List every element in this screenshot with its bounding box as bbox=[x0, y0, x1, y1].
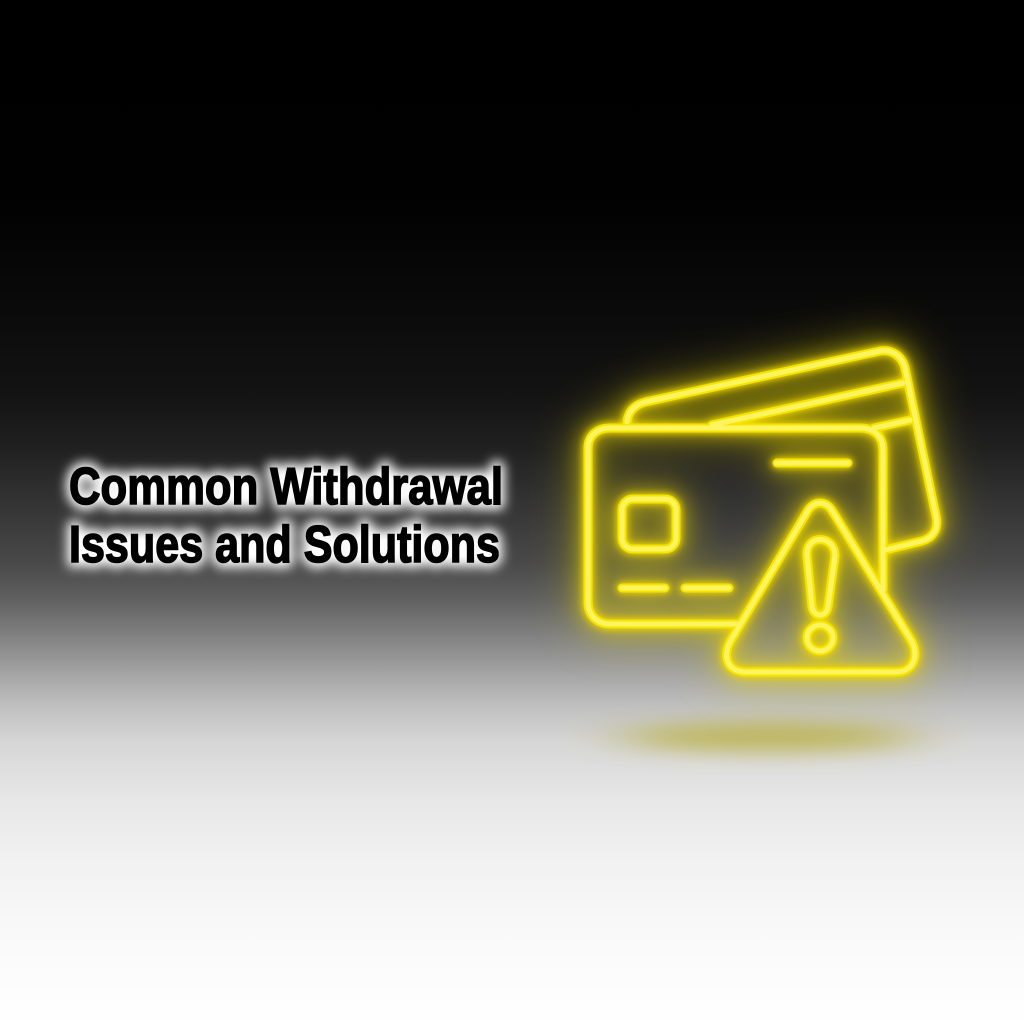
tube highlight bbox=[588, 351, 937, 672]
title bbox=[69, 458, 503, 574]
title text: Common Withdrawal bbox=[69, 458, 503, 516]
tight glow bbox=[588, 351, 937, 672]
title text bbox=[69, 458, 503, 574]
wide outer glow bbox=[588, 351, 937, 672]
title glow: Common Withdrawal bbox=[69, 458, 503, 516]
title glow bbox=[69, 458, 503, 574]
title glow: Issues and Solutions bbox=[69, 516, 500, 574]
title text: Issues and Solutions bbox=[69, 516, 500, 574]
neon tube bbox=[588, 351, 937, 672]
mid glow bbox=[588, 351, 937, 672]
icon: neon credit cards with warning triangle bbox=[588, 351, 937, 672]
icon floor shadow bbox=[618, 723, 918, 751]
